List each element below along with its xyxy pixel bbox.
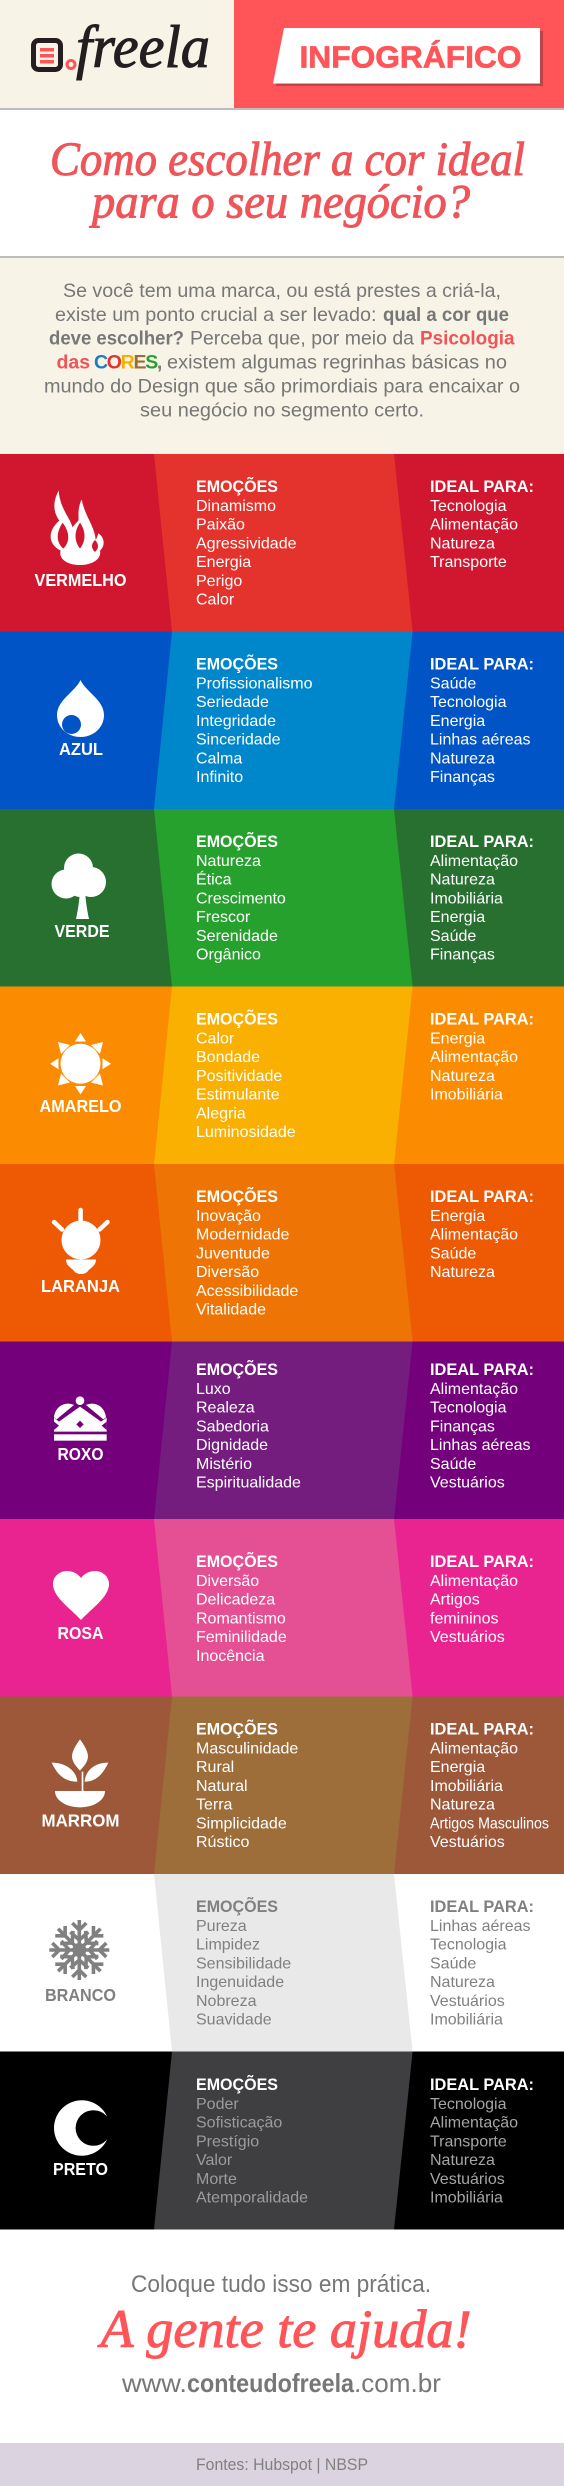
panel: vermelho xyxy=(0,454,564,632)
ideal para: vermelho: Tecnologia xyxy=(430,498,507,515)
call to action: A gente te ajuda! xyxy=(97,2299,471,2359)
ideal para: azul xyxy=(430,656,534,786)
emoções: marrom: EMOÇÕES xyxy=(196,1718,278,1738)
ideal para: azul: IDEAL PARA: xyxy=(430,656,534,674)
emoções: vermelho: Agressividade xyxy=(196,535,297,552)
emoções: roxo: Realeza xyxy=(196,1400,255,1417)
intro text: existe um ponto crucial a ser levado: xyxy=(55,304,382,326)
ideal para: branco: Imobiliária xyxy=(430,2012,503,2028)
ideal para: marrom: Alimentação xyxy=(430,1740,518,1758)
emoções: preto: Valor xyxy=(196,2152,233,2169)
emoções: azul: Seriedade xyxy=(196,694,269,711)
emoções: azul: Calma xyxy=(196,750,242,767)
ideal para: marrom: Imobiliária xyxy=(430,1778,503,1795)
icon: snowflake xyxy=(49,1920,109,1980)
ideal para: vermelho: Natureza xyxy=(430,535,495,552)
panel: verde xyxy=(0,809,564,986)
ideal para: verde: Natureza xyxy=(430,872,495,889)
emoções: rosa: Inocência xyxy=(196,1648,265,1665)
ideal para: amarelo: Natureza xyxy=(430,1068,495,1085)
intro text: mundo do Design que são primordiais para encaixar o xyxy=(44,376,520,398)
title xyxy=(50,133,525,228)
ideal para: laranja: Energia xyxy=(430,1208,485,1225)
title: Como escolher a cor ideal xyxy=(50,133,525,186)
ideal para: rosa: IDEAL PARA: xyxy=(430,1553,534,1571)
label: branco: BRANCO xyxy=(45,1985,116,2005)
ideal para: roxo: Saúde xyxy=(430,1456,476,1473)
ideal para: amarelo: Energia xyxy=(430,1030,485,1048)
footer: sources xyxy=(0,2443,564,2486)
emoções: laranja: Inovação xyxy=(196,1208,261,1225)
emoções: amarelo: Positividade xyxy=(196,1068,282,1085)
label: vermelho: VERMELHO xyxy=(34,570,126,590)
emoções: laranja: Diversão xyxy=(196,1264,259,1281)
emoções: azul: Infinito xyxy=(196,769,243,786)
emoções: vermelho: Perigo xyxy=(196,573,242,590)
emoções: branco xyxy=(196,1896,291,2028)
ideal para: azul: Saúde xyxy=(430,676,476,692)
emoções: amarelo: EMOÇÕES xyxy=(196,1008,278,1028)
call to action: www. xyxy=(121,2368,187,2398)
emoções: preto: Atemporalidade xyxy=(196,2190,308,2206)
ideal para: amarelo xyxy=(430,1010,534,1104)
emoções: laranja: Juventude xyxy=(196,1245,270,1262)
emoções: rosa: Diversão xyxy=(196,1573,259,1590)
ideal para: branco: Linhas aéreas xyxy=(430,1918,531,1935)
ideal para: branco xyxy=(430,1898,534,2028)
ideal para: verde xyxy=(430,833,534,964)
panel: azul xyxy=(0,632,564,809)
intro text: Psicologia xyxy=(420,328,515,350)
emoções: laranja: EMOÇÕES xyxy=(196,1186,278,1206)
title: para o seu negócio? xyxy=(89,176,470,228)
emoções: marrom: Rural xyxy=(196,1759,234,1776)
emoções: roxo: EMOÇÕES xyxy=(196,1359,278,1379)
icon: heart xyxy=(53,1571,109,1620)
ideal para: laranja: Saúde xyxy=(430,1245,476,1262)
ideal para: verde: Saúde xyxy=(430,928,476,945)
ideal para: azul: Natureza xyxy=(430,750,495,767)
emoções: branco: Limpidez xyxy=(196,1937,260,1954)
ideal para: branco: Vestuários xyxy=(430,1993,505,2010)
emoções: verde: Orgânico xyxy=(196,946,261,964)
emoções: marrom: Terra xyxy=(196,1797,233,1814)
ideal para: verde: Imobiliária xyxy=(430,890,503,907)
emoções: verde: Natureza xyxy=(196,853,261,870)
emoções: amarelo: Alegria xyxy=(196,1105,246,1122)
ideal para: marrom: Artigos Masculinos xyxy=(430,1815,549,1832)
ideal para: rosa: femininos xyxy=(430,1610,498,1627)
intro text: seu negócio no segmento certo. xyxy=(140,400,424,422)
icon: sun xyxy=(50,1033,111,1094)
icon: tree xyxy=(52,854,106,919)
emoções: rosa: Feminilidade xyxy=(196,1629,287,1646)
emoções: branco: Nobreza xyxy=(196,1993,257,2010)
icon: water drop xyxy=(57,680,104,737)
intro text: Perceba que, por meio da xyxy=(190,328,414,350)
emoções: vermelho xyxy=(196,476,297,608)
label: preto: PRETO xyxy=(53,2159,108,2179)
emoções: verde: Crescimento xyxy=(196,890,286,907)
ideal para: roxo: Vestuários xyxy=(430,1474,505,1492)
ideal para: amarelo: IDEAL PARA: xyxy=(430,1010,534,1028)
label: roxo: ROXO xyxy=(58,1444,104,1464)
ideal para: branco: IDEAL PARA: xyxy=(430,1898,534,1916)
ideal para: azul: Finanças xyxy=(430,769,495,786)
intro text: deve escolher? xyxy=(49,328,184,350)
intro text: C xyxy=(94,352,108,374)
ideal para: preto: Vestuários xyxy=(430,2171,505,2188)
footer: sources: Fontes: Hubspot | NBSP xyxy=(196,2455,368,2474)
ideal para: preto: Alimentação xyxy=(430,2115,518,2132)
ideal para: roxo: Alimentação xyxy=(430,1381,518,1398)
label: amarelo: AMARELO xyxy=(40,1096,122,1116)
ideal para: rosa: Vestuários xyxy=(430,1629,505,1646)
emoções: roxo: Sabedoria xyxy=(196,1418,269,1435)
emoções: amarelo: Bondade xyxy=(196,1049,260,1066)
ideal para: verde: Alimentação xyxy=(430,853,518,870)
ideal para: amarelo: Imobiliária xyxy=(430,1087,503,1104)
ideal para: preto: Natureza xyxy=(430,2152,495,2169)
emoções: branco: Ingenuidade xyxy=(196,1974,284,1991)
ideal para: roxo: Linhas aéreas xyxy=(430,1437,531,1454)
emoções: preto: Morte xyxy=(196,2171,237,2188)
intro text: Se você tem uma marca, ou está prestes a criá-la, xyxy=(63,280,501,302)
emoções: marrom: Masculinidade xyxy=(196,1740,298,1758)
ideal para: vermelho: Transporte xyxy=(430,554,507,571)
ideal para: azul: Linhas aéreas xyxy=(430,732,531,749)
emoções: roxo: Dignidade xyxy=(196,1437,268,1454)
label: azul: AZUL xyxy=(59,739,103,759)
emoções: branco: Suavidade xyxy=(196,2012,272,2028)
panel: amarelo xyxy=(0,986,564,1164)
ideal para: preto: Tecnologia xyxy=(430,2096,507,2113)
emoções: preto: Prestígio xyxy=(196,2133,259,2150)
ideal para: azul: Energia xyxy=(430,713,485,730)
emoções: marrom: Natural xyxy=(196,1778,248,1795)
ideal para: azul: Tecnologia xyxy=(430,694,507,711)
ideal para: verde: Finanças xyxy=(430,946,495,964)
emoções: preto: Poder xyxy=(196,2096,239,2113)
ideal para: laranja: Alimentação xyxy=(430,1227,518,1244)
emoções: azul xyxy=(196,654,313,786)
emoções: verde: Serenidade xyxy=(196,928,278,945)
icon: flame xyxy=(51,491,104,565)
emoções: verde: Frescor xyxy=(196,909,251,926)
emoções: laranja: Acessibilidade xyxy=(196,1283,298,1300)
icon: crown xyxy=(54,1396,107,1441)
ideal para: vermelho: Alimentação xyxy=(430,517,518,534)
emoções: rosa xyxy=(196,1551,287,1665)
intro text: ORES, xyxy=(107,352,162,374)
emoções: vermelho: Paixão xyxy=(196,517,245,534)
panel: laranja xyxy=(0,1164,564,1342)
ideal para: marrom xyxy=(430,1720,549,1851)
ideal para: preto xyxy=(430,2076,534,2206)
intro text xyxy=(44,280,520,422)
call to action: .com.br xyxy=(354,2368,441,2398)
emoções: amarelo: Estimulante xyxy=(196,1087,280,1104)
emoções: roxo: Luxo xyxy=(196,1381,231,1398)
label: marrom: MARROM xyxy=(42,1810,120,1830)
emoções: branco: Pureza xyxy=(196,1918,247,1935)
ideal para: laranja xyxy=(430,1188,534,1281)
emoções: laranja: Vitalidade xyxy=(196,1302,266,1318)
emoções: azul: Profissionalismo xyxy=(196,676,313,692)
infográfico banner: INFOGRÁFICO xyxy=(300,40,522,74)
ideal para: marrom: Natureza xyxy=(430,1797,495,1814)
emoções: roxo: Mistério xyxy=(196,1456,252,1473)
ideal para: preto: Transporte xyxy=(430,2133,507,2150)
emoções: verde xyxy=(196,831,286,964)
emoções: branco: Sensibilidade xyxy=(196,1955,291,1972)
emoções: vermelho: Energia xyxy=(196,554,251,571)
emoções: rosa: Delicadeza xyxy=(196,1592,275,1609)
ideal para: vermelho xyxy=(430,478,534,571)
ideal para: branco: Saúde xyxy=(430,1955,476,1972)
call to action xyxy=(97,2271,471,2398)
emoções: azul: Integridade xyxy=(196,713,276,730)
emoções: preto: Sofisticação xyxy=(196,2115,282,2132)
intro text: existem algumas regrinhas básicas no xyxy=(167,352,507,374)
ideal para: roxo: Tecnologia xyxy=(430,1400,507,1417)
ideal para: verde: IDEAL PARA: xyxy=(430,833,534,851)
emoções: amarelo xyxy=(196,1008,296,1141)
icon: plant xyxy=(52,1739,108,1807)
intro text: qual a cor que xyxy=(383,304,509,326)
panel: marrom xyxy=(0,1696,564,1874)
emoções: azul: EMOÇÕES xyxy=(196,654,278,674)
panel: roxo xyxy=(0,1342,564,1519)
ideal para: laranja: Natureza xyxy=(430,1264,495,1281)
infográfico banner xyxy=(273,28,543,86)
panel: branco xyxy=(0,1874,564,2052)
ideal para: laranja: IDEAL PARA: xyxy=(430,1188,534,1206)
ideal para: roxo: Finanças xyxy=(430,1418,495,1435)
emoções: amarelo: Calor xyxy=(196,1030,235,1048)
call to action: conteudofreela xyxy=(187,2368,354,2398)
label: rosa: ROSA xyxy=(58,1623,104,1643)
emoções: amarelo: Luminosidade xyxy=(196,1124,296,1141)
label: verde: VERDE xyxy=(54,921,110,941)
ideal para: marrom: Energia xyxy=(430,1759,485,1776)
emoções: marrom: Simplicidade xyxy=(196,1815,287,1832)
ideal para: verde: Energia xyxy=(430,909,485,926)
ideal para: preto: Imobiliária xyxy=(430,2190,503,2206)
panel: preto xyxy=(0,2052,564,2230)
ideal para: preto: IDEAL PARA: xyxy=(430,2076,534,2094)
ideal para: rosa: Artigos xyxy=(430,1592,480,1609)
emoções: marrom xyxy=(196,1718,298,1851)
ideal para: vermelho: IDEAL PARA: xyxy=(430,478,534,496)
emoções: vermelho: Calor xyxy=(196,592,235,608)
emoções: preto: EMOÇÕES xyxy=(196,2074,278,2094)
emoções: verde: EMOÇÕES xyxy=(196,831,278,851)
emoções: rosa: EMOÇÕES xyxy=(196,1551,278,1571)
emoções: roxo xyxy=(196,1359,301,1492)
emoções: vermelho: Dinamismo xyxy=(196,498,276,515)
ideal para: roxo: IDEAL PARA: xyxy=(430,1361,534,1379)
ideal para: rosa: Alimentação xyxy=(430,1573,518,1590)
emoções: vermelho: EMOÇÕES xyxy=(196,476,278,496)
intro text: das xyxy=(56,352,96,374)
emoções: azul: Sinceridade xyxy=(196,732,281,749)
header xyxy=(0,0,564,110)
panel: rosa xyxy=(0,1519,564,1696)
ideal para: branco: Natureza xyxy=(430,1974,495,1991)
ideal para: rosa xyxy=(430,1553,534,1646)
emoções: preto xyxy=(196,2074,308,2206)
icon: light bulb xyxy=(54,1210,108,1274)
ideal para: roxo xyxy=(430,1361,534,1492)
ideal para: marrom: Vestuários xyxy=(430,1834,505,1851)
ideal para: amarelo: Alimentação xyxy=(430,1049,518,1066)
label: laranja: LARANJA xyxy=(41,1276,120,1296)
emoções: roxo: Espiritualidade xyxy=(196,1474,301,1492)
ideal para: marrom: IDEAL PARA: xyxy=(430,1720,534,1738)
emoções: branco: EMOÇÕES xyxy=(196,1896,278,1916)
emoções: marrom: Rústico xyxy=(196,1834,249,1851)
logo: freela xyxy=(76,14,210,80)
intro panel xyxy=(0,256,564,454)
ideal para: branco: Tecnologia xyxy=(430,1937,507,1954)
emoções: verde: Ética xyxy=(196,870,232,889)
emoções: rosa: Romantismo xyxy=(196,1610,286,1627)
call to action: Coloque tudo isso em prática. xyxy=(131,2271,431,2298)
emoções: laranja xyxy=(196,1186,298,1318)
icon: crescent moon xyxy=(54,2100,111,2156)
emoções: laranja: Modernidade xyxy=(196,1227,290,1244)
